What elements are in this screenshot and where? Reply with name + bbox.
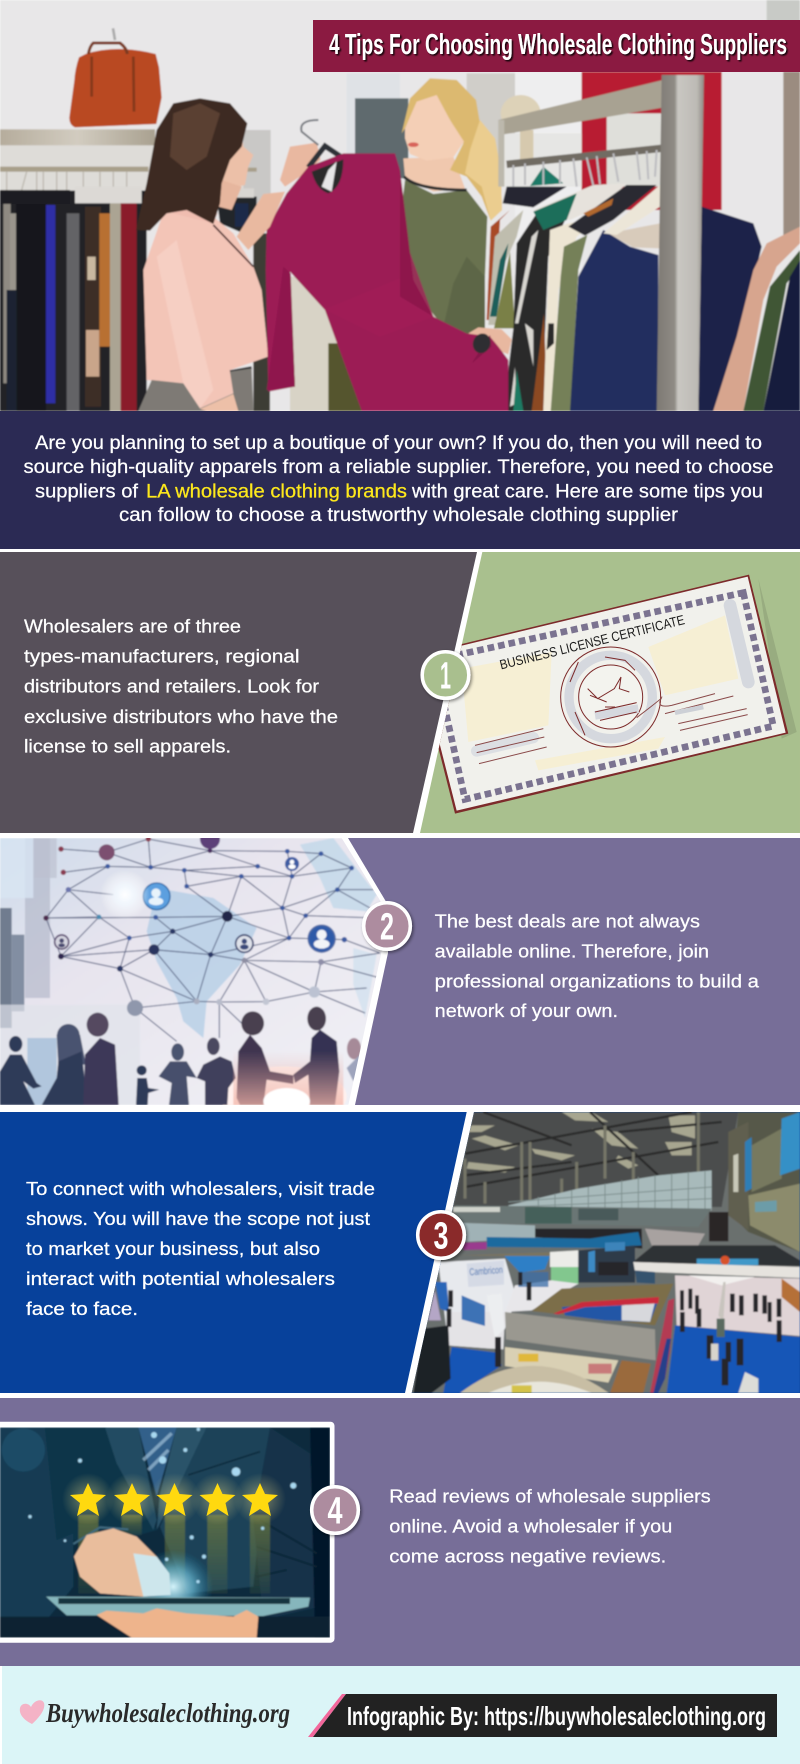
panel: introduction: source high-quality apparels from a reliable supplier. Therefore, you need to choose [24, 457, 774, 478]
tip 2 text: available online. Therefore, join [435, 940, 709, 961]
tip 3 trade show hall photo [405, 1112, 800, 1393]
tip 3 text [26, 1178, 375, 1319]
tip 3 trade show hall photo: Cambricon [469, 1265, 503, 1278]
badge 4 [312, 1487, 358, 1533]
panel: introduction [0, 411, 800, 549]
tip 1 text: Wholesalers are of three [24, 616, 241, 636]
badge 1 [422, 652, 469, 698]
badge 3 [418, 1212, 464, 1258]
tip 3 text: To connect with wholesalers, visit trade [26, 1178, 375, 1199]
badge 2 [364, 903, 410, 949]
panel: tip 2 [0, 838, 800, 1105]
tip 4 text: online. Avoid a wholesaler if you [389, 1515, 672, 1536]
certificate caption: BUSINESS LICENSE CERTIFICATE [498, 612, 686, 672]
panel: footer [2, 1666, 800, 1764]
panel: introduction: with great care. Here are some tips you [411, 482, 763, 502]
tip 2 text: network of your own. [435, 1000, 618, 1021]
tip 1 text [24, 616, 338, 757]
tip 2 text: The best deals are not always [435, 910, 700, 931]
tip 1 background [0, 552, 477, 833]
tip 3 text: shows. You will have the scope not just [26, 1208, 370, 1229]
logo wordmark: Buywholesaleclothing.org [45, 1698, 290, 1728]
icon: pink heart [20, 1700, 44, 1724]
tip 1 text: types-manufacturers, regional [24, 646, 300, 666]
panel: introduction: Are you planning to set up a boutique of your own? If you do, then you will need to [35, 433, 762, 454]
badge 3: 3 [434, 1216, 448, 1258]
tip 3 white divider [405, 1112, 474, 1393]
tip 1 text: license to sell apparels. [24, 736, 231, 757]
tip 3 text: interact with potential wholesalers [26, 1268, 335, 1289]
tip 2 text [435, 910, 760, 1021]
title banner [313, 20, 800, 72]
panel: tip 4 [0, 1398, 800, 1666]
tip 3 text: face to face. [26, 1298, 138, 1319]
tip 1 certificate illustration [415, 552, 800, 833]
tip 4 photo frame [0, 1422, 334, 1643]
panel: introduction: can follow to choose a trustworthy wholesale clothing supplier [119, 505, 679, 526]
tip 4 text [389, 1485, 711, 1566]
tip 2 text: professional organizations to build a [435, 970, 760, 991]
badge 1: 1 [440, 656, 451, 698]
five stars [62, 1473, 286, 1525]
tip 4 text: come across negative reviews. [389, 1546, 666, 1566]
panel: introduction: suppliers of [35, 482, 139, 502]
credit bar [308, 1694, 777, 1737]
tip 4 five star rating photo [0, 1427, 330, 1638]
tip 1 text: exclusive distributors who have the [24, 706, 338, 727]
tip 2 network and business people image [0, 838, 382, 1105]
panel: tip 1 [0, 552, 800, 833]
tip 4 text: Read reviews of wholesale suppliers [389, 1485, 711, 1506]
badge 4: 4 [328, 1490, 342, 1532]
tip 1 text: distributors and retailers. Look for [24, 675, 319, 696]
panel: introduction: LA wholesale clothing brands [146, 482, 407, 502]
hero photo: two women with a magenta dress in a boutique [0, 0, 800, 411]
tip 3 text: to market your business, but also [26, 1238, 320, 1259]
panel: tip 3 [0, 1112, 800, 1393]
badge 2: 2 [380, 906, 394, 948]
tip 2 white border around image [0, 838, 388, 1105]
